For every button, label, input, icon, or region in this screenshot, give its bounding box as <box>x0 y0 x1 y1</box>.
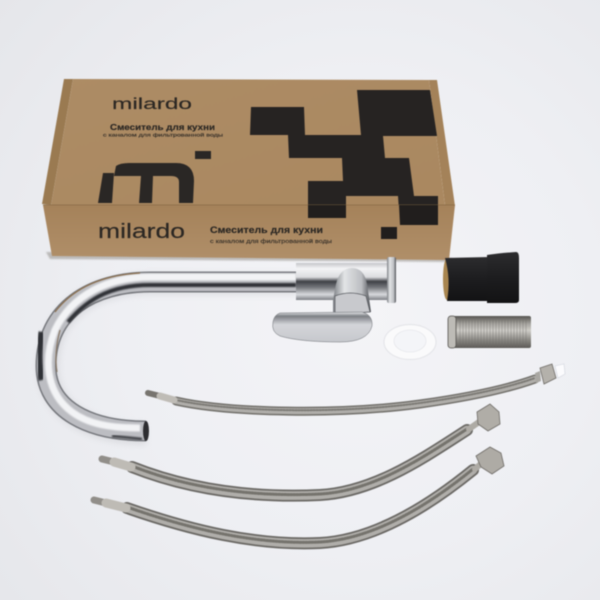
flange <box>387 257 396 303</box>
pattern on front face left <box>308 205 346 218</box>
pattern on front face right <box>399 205 438 225</box>
box left flap <box>42 79 73 205</box>
hose 3 <box>94 461 484 543</box>
product title front: Смеситель для кухни <box>210 225 323 236</box>
hose 3 nut <box>476 447 504 474</box>
hose 1 push-fit connector <box>535 364 565 384</box>
brand on top face: milardo <box>112 96 192 113</box>
box top face <box>51 79 445 205</box>
faucet body <box>273 257 396 342</box>
photo contents <box>39 79 565 543</box>
cardboard box <box>42 79 455 262</box>
product subtitle front: с каналом для фильтрованной воды <box>210 238 332 245</box>
logo m <box>98 151 211 203</box>
product subtitle top: с каналом для фильтрованной воды <box>103 132 224 138</box>
hose 2 <box>102 422 479 496</box>
black plastic nut <box>443 252 519 303</box>
body cylinder <box>296 263 388 300</box>
lever stem <box>333 268 371 312</box>
black pixel pattern <box>250 90 438 225</box>
handle <box>273 312 372 342</box>
brand on front face: milardo <box>98 220 185 243</box>
faucet spout <box>39 273 298 439</box>
hose 1 <box>148 378 535 411</box>
front face <box>43 205 455 260</box>
fold line <box>43 204 455 206</box>
spout opening <box>143 421 149 441</box>
white gasket <box>384 324 436 360</box>
product title top: Смеситель для кухни <box>110 123 215 132</box>
threaded sleeve <box>448 316 531 348</box>
box right flap <box>429 80 455 206</box>
small square <box>381 227 397 239</box>
hose 2 nut <box>477 404 500 431</box>
lever collar <box>335 293 370 314</box>
